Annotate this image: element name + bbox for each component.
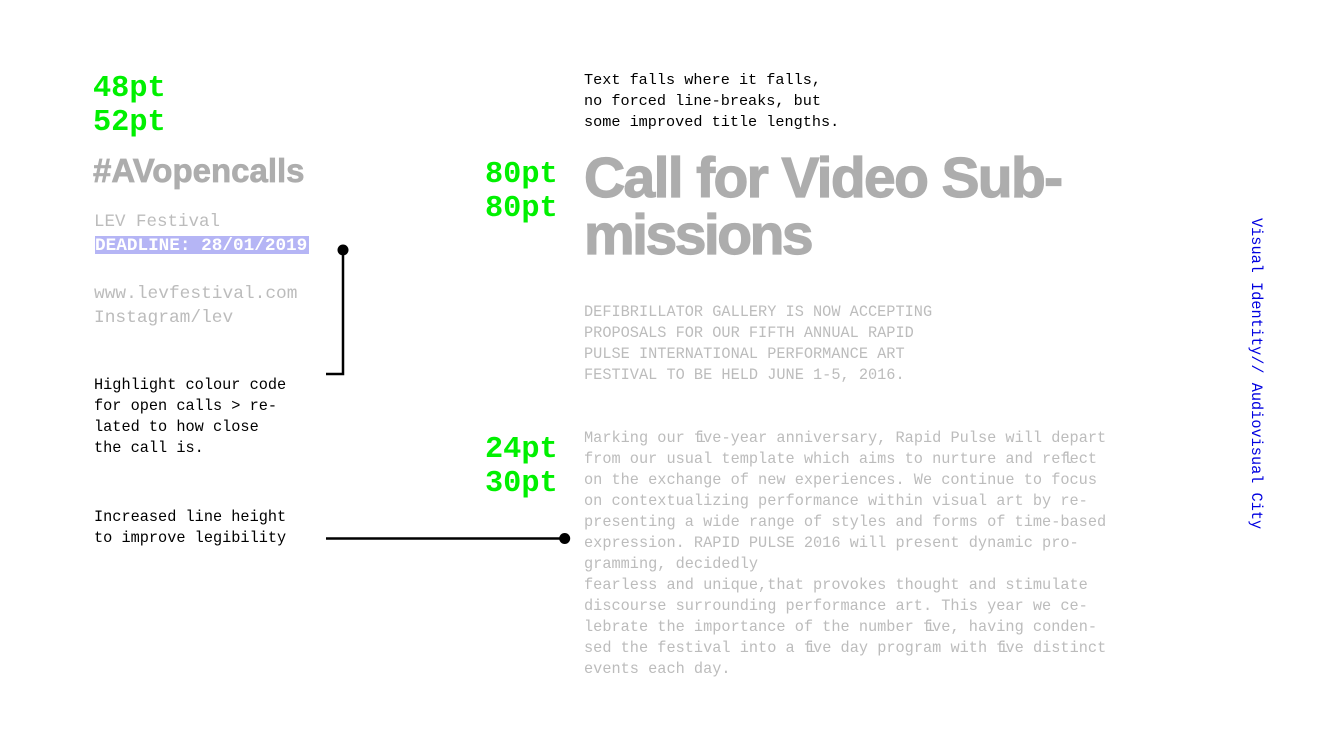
connector: line height arrow <box>326 533 570 544</box>
label: 48pt 52pt: 48pt 52pt <box>93 72 166 140</box>
annotation: highlight colour: Highlight colour code for open calls > re- lated to how close the call is. <box>94 376 286 457</box>
note: title lengths: Text falls where it falls, no forced line-breaks, but some improved title lengths. <box>584 71 839 131</box>
body paragraph: Marking our five-year anniversary, Rapid Pulse will depart from our usual template which aims to nurture and reflect on the exchange of new experiences. We continue to focus on contextualizing performance within visual art by re- presenting a wide range of styles and forms of time-based expression. RAPID PULSE 2016 will present dynamic pro- gramming, decidedly fearless and unique,that provokes thought and stimulate discourse surrounding performance art. This year we ce- lebrate the importance of the number five, having conden- sed the festival into a five day program with five distinct events each day. <box>584 429 1106 678</box>
intro paragraph: DEFIBRILLATOR GALLERY IS NOW ACCEPTING PROPOSALS FOR OUR FIFTH ANNUAL RAPID PULSE INTERNATIONAL PERFORMANCE ART FESTIVAL TO BE HELD JUNE 1-5, 2016. <box>584 303 932 384</box>
event details: LEV Festival DEADLINE: 28/01/2019 www.levfestival.com Instagram/lev <box>94 212 307 328</box>
connector: deadline bracket <box>326 244 348 376</box>
main title: Call for Video Sub- missions <box>584 146 1061 267</box>
side heading: #AVopencalls: #AVopencalls <box>93 152 305 189</box>
label: 24pt 30pt: 24pt 30pt <box>485 433 558 501</box>
vertical credit: Visual Identity// Audiovisual City <box>1247 218 1265 529</box>
label: 80pt 80pt: 80pt 80pt <box>485 158 558 226</box>
annotation: line height: Increased line height to improve legibility <box>94 508 286 547</box>
